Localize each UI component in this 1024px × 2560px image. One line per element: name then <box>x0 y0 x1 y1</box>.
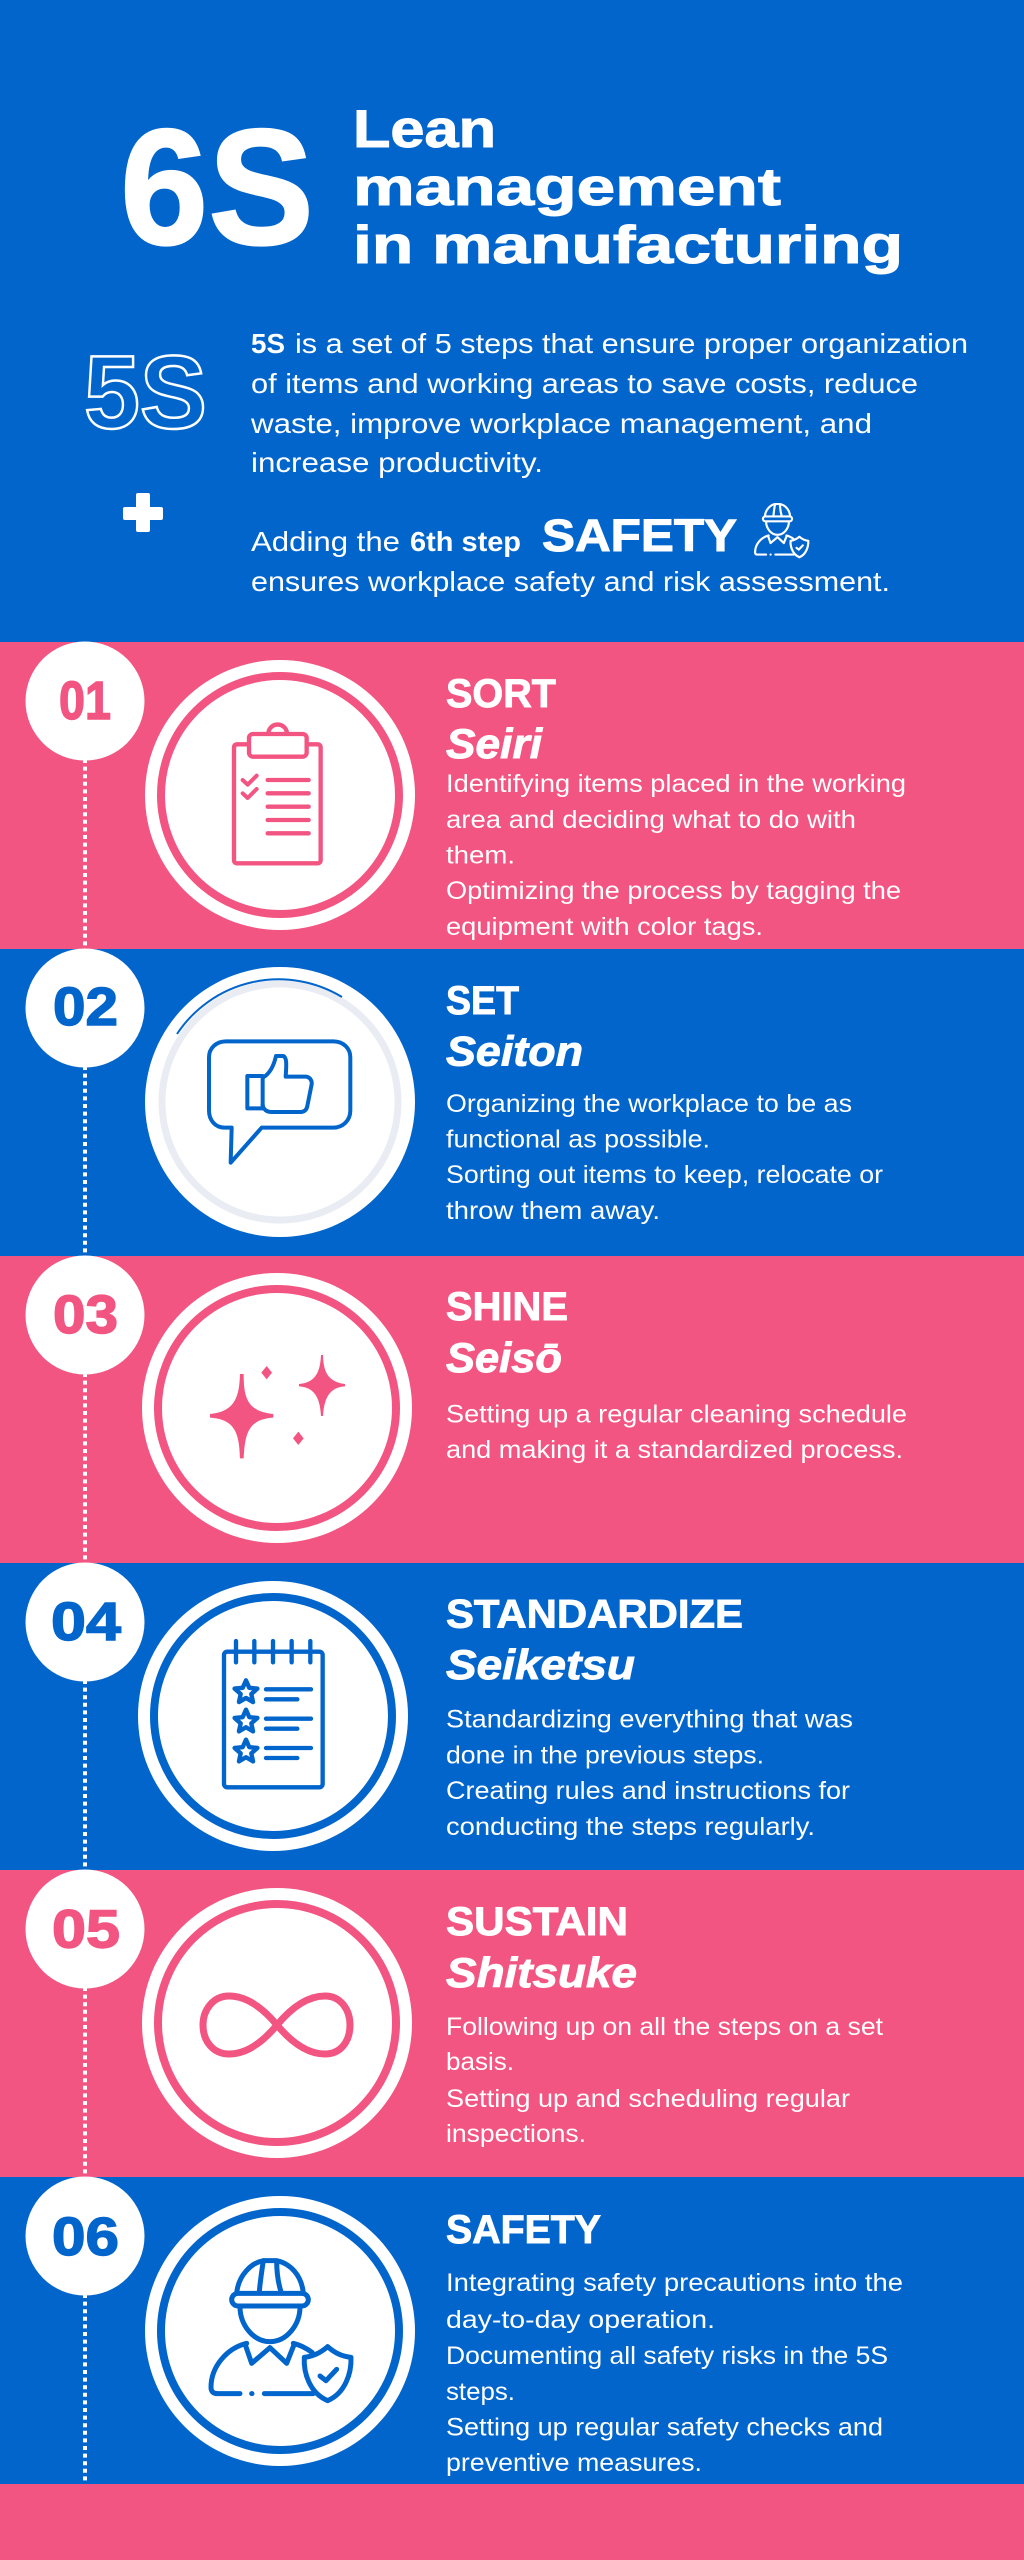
text: sort: them. <box>446 842 515 870</box>
dotted connector <box>83 1987 87 2177</box>
number badge 02: 02 <box>53 977 118 1037</box>
number badge 02 <box>26 948 144 1068</box>
icon circle: thumbs up speech bubble <box>145 967 415 1237</box>
text: shine: SHINE <box>446 1285 568 1329</box>
text: set: functional as possible. <box>446 1126 710 1154</box>
text: safety: day-to-day operation. <box>446 2306 715 2334</box>
text: sort: equipment with color tags. <box>446 913 763 941</box>
text: sustain: inspections. <box>446 2120 586 2148</box>
text block: sixth step <box>251 510 890 597</box>
text block: 5S description: is a set of 5 steps that ensure proper organization <box>295 328 968 359</box>
number badge 06: 06 <box>52 2207 119 2267</box>
text: sustain: Following up on all the steps on a set <box>446 2013 883 2041</box>
dotted connector <box>83 1066 87 1256</box>
icon circle: safety worker <box>145 2196 415 2466</box>
icon circle: clipboard <box>145 660 415 930</box>
icon: plus sign <box>123 493 163 532</box>
text: set: Seiton <box>446 1028 583 1074</box>
text: sustain: basis. <box>446 2048 514 2076</box>
text: safety <box>446 2208 903 2477</box>
number badge 04 <box>26 1562 144 1682</box>
title: Lean management in manufacturing: management <box>353 158 781 217</box>
number badge 03 <box>26 1256 144 1374</box>
text: sort: SORT <box>446 672 556 716</box>
text block: sixth step: ensures workplace safety and risk assessment. <box>251 566 890 597</box>
text block: 5S description <box>250 328 968 478</box>
icon: safety worker small <box>755 504 808 557</box>
number badge 05 <box>26 1870 144 1988</box>
text: sort: Identifying items placed in the working <box>446 770 906 798</box>
panel: step 03 shine <box>0 1256 1024 1563</box>
text: sustain <box>446 1900 883 2148</box>
text: sustain: Setting up and scheduling regular <box>446 2085 850 2113</box>
number badge 03: 03 <box>53 1285 118 1345</box>
text: set: SET <box>446 979 519 1023</box>
text: standardize: Creating rules and instructions for <box>446 1777 850 1805</box>
text block: 5S description: increase productivity. <box>251 447 543 478</box>
text block: sixth step: Adding the <box>251 526 400 557</box>
text: set <box>446 979 883 1225</box>
text: shine: Setting up a regular cleaning schedule <box>446 1400 907 1428</box>
icon circle: infinity <box>142 1888 412 2158</box>
outline 5S label: 5S <box>84 335 207 451</box>
text: safety: Documenting all safety risks in the 5S <box>446 2342 888 2370</box>
text: standardize: done in the previous steps. <box>446 1742 764 1770</box>
text block: 5S description: waste, improve workplace management, and <box>250 408 872 439</box>
number badge 05: 05 <box>52 1900 120 1960</box>
text: set: Organizing the workplace to be as <box>446 1090 852 1118</box>
text: sort: Optimizing the process by tagging the <box>446 877 901 905</box>
number badge 01: 01 <box>59 671 111 731</box>
panel: step 04 standardize <box>0 1562 1024 1870</box>
panel: step 05 sustain <box>0 1870 1024 2177</box>
text: sustain: Shitsuke <box>446 1949 637 1996</box>
text: sort <box>446 672 906 941</box>
text: shine: Seisō <box>446 1334 562 1381</box>
dotted connector <box>83 1373 87 1563</box>
number badge 06 <box>26 2176 144 2296</box>
text block: 5S description: of items and working areas to save costs, reduce <box>251 368 918 399</box>
text block: 5S description: 5S <box>251 328 285 359</box>
dotted connector <box>83 2294 87 2484</box>
panel: header <box>0 0 1024 642</box>
number badge 01 <box>26 642 144 760</box>
icon circle: notebook with stars <box>138 1581 408 1851</box>
text: sort: Seiri <box>446 720 543 767</box>
text block: sixth step: 6th step <box>410 526 521 557</box>
text: standardize <box>446 1592 853 1841</box>
text: safety: SAFETY <box>446 2208 601 2252</box>
text: set: throw them away. <box>446 1197 660 1225</box>
footer band <box>0 2484 1024 2560</box>
panel: step 02 set <box>0 948 1024 1256</box>
text: safety: Setting up regular safety checks and <box>446 2414 883 2442</box>
dotted connector <box>83 759 87 949</box>
text: shine: and making it a standardized process. <box>446 1436 903 1464</box>
text: set: Sorting out items to keep, relocate or <box>446 1161 883 1189</box>
text: safety: Integrating safety precautions into the <box>446 2269 903 2297</box>
panel: step 01 sort <box>0 642 1024 949</box>
text block: sixth step: SAFETY <box>542 510 737 561</box>
number badge 04: 04 <box>51 1592 121 1652</box>
big title 6S: 6S <box>120 95 314 279</box>
text: sustain: SUSTAIN <box>446 1900 628 1944</box>
text: standardize: Seiketsu <box>446 1641 635 1688</box>
text: safety: steps. <box>446 2378 515 2406</box>
dotted connector <box>83 1680 87 1870</box>
title: Lean management in manufacturing: in manufacturing <box>353 216 903 275</box>
text: standardize: Standardizing everything that was <box>446 1706 853 1734</box>
icon circle: sparkles <box>142 1273 412 1543</box>
text: sort: area and deciding what to do with <box>446 806 856 834</box>
text: shine <box>446 1285 907 1464</box>
title: Lean management in manufacturing <box>353 100 903 275</box>
text: standardize: conducting the steps regularly. <box>446 1813 815 1841</box>
panel: step 06 safety <box>0 2176 1024 2484</box>
text: standardize: STANDARDIZE <box>446 1592 743 1636</box>
title: Lean management in manufacturing: Lean <box>353 100 496 159</box>
text: safety: preventive measures. <box>446 2449 702 2477</box>
